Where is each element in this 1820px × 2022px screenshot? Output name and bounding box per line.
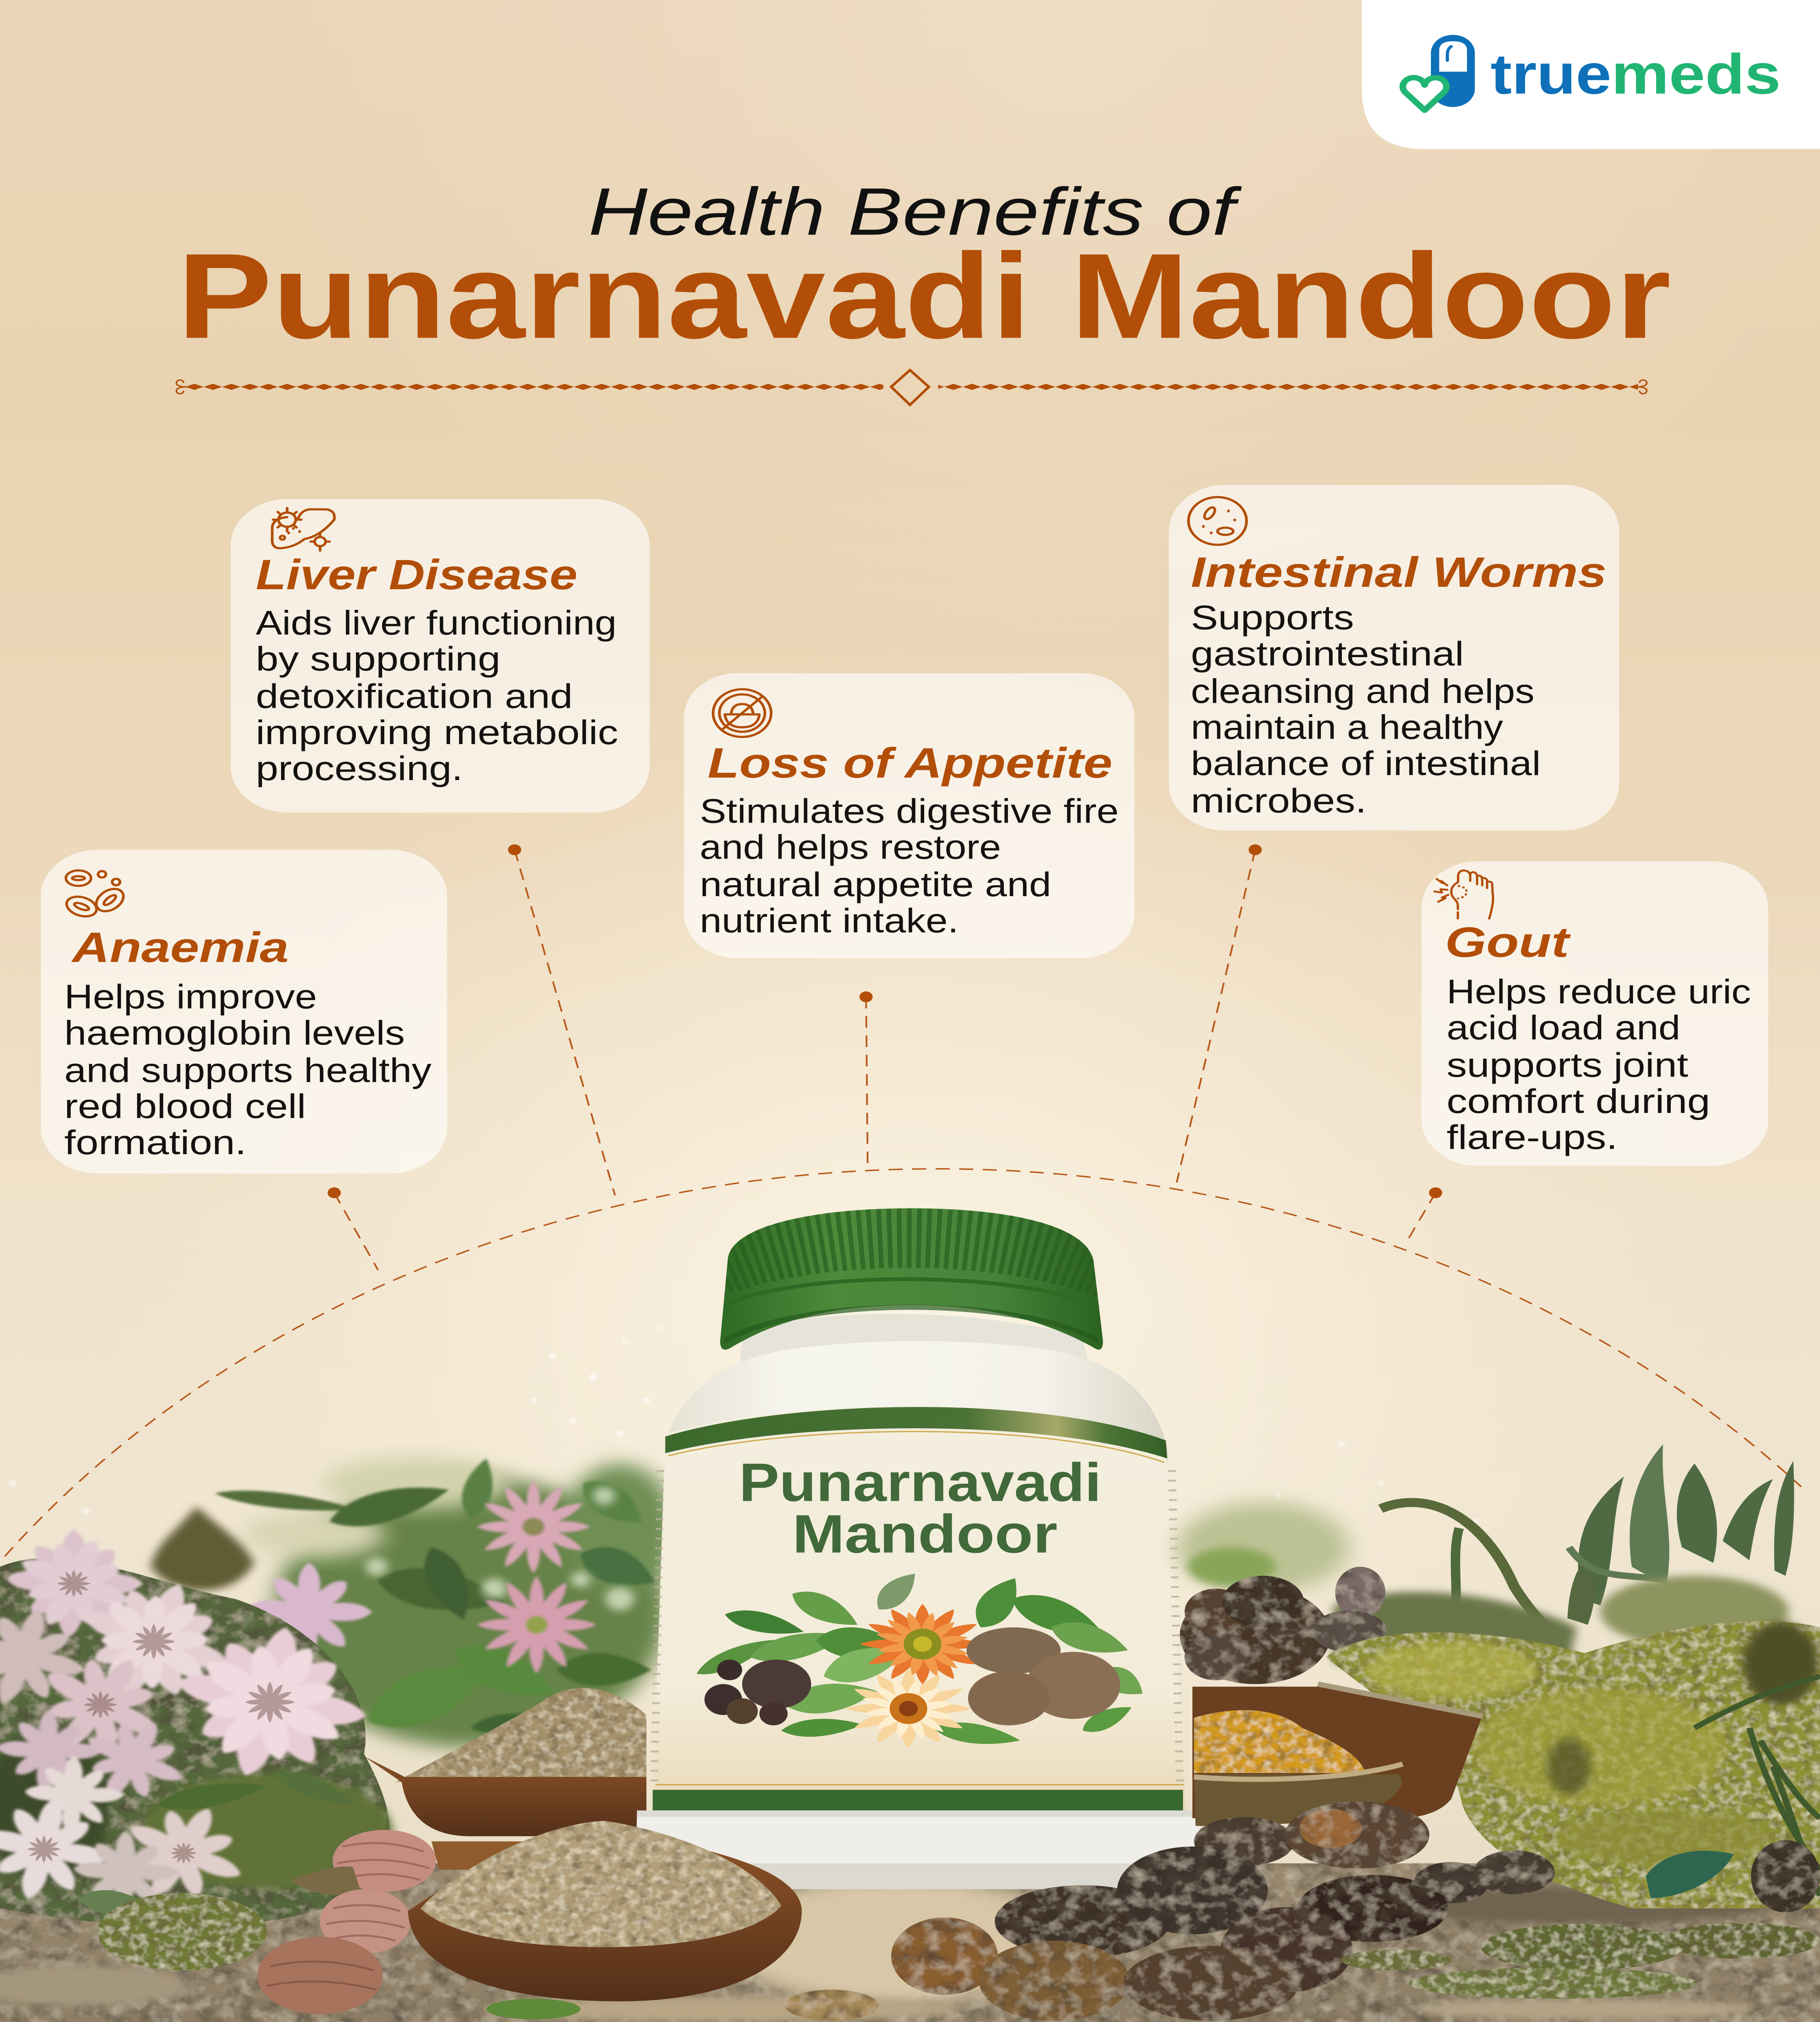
body text: natural appetite and <box>700 865 1051 903</box>
body text: by supporting <box>256 640 501 678</box>
heading: Gout <box>1445 918 1571 966</box>
body text: and helps restore <box>700 828 1001 866</box>
roots <box>705 1627 1120 1725</box>
panel: intestinal worms <box>1169 485 1619 831</box>
icon: bowl with slash <box>713 689 771 737</box>
heading: Liver Disease <box>256 551 578 599</box>
scene: yellow-green herbs mound <box>1326 1621 1820 1908</box>
body text <box>700 792 1119 939</box>
body text: flare-ups. <box>1447 1118 1618 1156</box>
scene: front dark rocks <box>785 1802 1555 2021</box>
bottle shoulder and neck <box>737 1314 1092 1382</box>
icon: microbes <box>1189 497 1246 545</box>
label text: Punarnavadi <box>739 1452 1101 1512</box>
panel: loss of appetite <box>684 673 1134 958</box>
scene: front powder bowl with nuts <box>257 1821 802 2014</box>
brand logo panel <box>1362 0 1820 149</box>
body text <box>64 977 432 1161</box>
body text: processing. <box>256 749 463 787</box>
heading: Loss of Appetite <box>708 739 1112 787</box>
base and lower band <box>656 1784 1185 1785</box>
body text: improving metabolic <box>256 713 618 751</box>
nuts <box>257 1830 526 2014</box>
body text: formation. <box>64 1123 246 1161</box>
orange flower <box>860 1603 985 1686</box>
icon: blood cells <box>63 870 129 920</box>
body text: microbes. <box>1191 782 1367 820</box>
label text <box>739 1452 1101 1564</box>
panel: anaemia <box>41 850 447 1174</box>
cap <box>720 1208 1103 1350</box>
body text: supports joint <box>1447 1046 1688 1084</box>
wordmark: true <box>1490 43 1611 106</box>
scene: left background foliage <box>150 1456 676 1747</box>
bottle of Punarnavadi Mandoor <box>635 1208 1200 1889</box>
body text: and supports healthy <box>64 1051 432 1089</box>
turmeric <box>1194 1710 1365 1773</box>
scene: moss <box>97 1893 267 1970</box>
brass bowl <box>1194 1775 1403 1826</box>
label herbs illustration <box>692 1567 1151 1750</box>
label <box>653 1407 1186 1812</box>
scene: right bowls with turmeric <box>1192 1684 1483 1826</box>
main heading: Punarnavadi Mandoor <box>177 228 1671 364</box>
body text: Supports <box>1191 599 1354 637</box>
scene: back powder bowl <box>364 1688 646 1836</box>
panel: gout <box>1422 861 1768 1166</box>
cream flower <box>846 1669 971 1748</box>
label text: Mandoor <box>792 1504 1058 1564</box>
body text: acid load and <box>1447 1009 1680 1047</box>
icon: liver <box>272 508 334 551</box>
body text: maintain a healthy <box>1191 708 1503 746</box>
body text: gastrointestinal <box>1191 635 1464 673</box>
panel: liver disease <box>231 499 650 812</box>
heading: Anaemia <box>71 924 289 971</box>
body text <box>256 603 618 787</box>
subtitle line: Health Benefits of <box>588 174 1242 249</box>
ornamental divider <box>176 370 1647 405</box>
body text: detoxification and <box>256 677 573 715</box>
body text: Helps reduce uric <box>1447 972 1751 1011</box>
scene: moss and teal leaf at right <box>487 1840 1820 2019</box>
body text: Helps improve <box>64 977 317 1016</box>
title <box>177 174 1671 364</box>
body text: cleansing and helps <box>1191 672 1534 710</box>
sparkles <box>9 1326 1478 1524</box>
body text <box>1191 599 1541 820</box>
body text: balance of intestinal <box>1191 744 1541 782</box>
scene: right back herbs and tall leaves <box>1177 1444 1794 1663</box>
top green band <box>665 1407 1167 1458</box>
bowl <box>408 1846 802 2001</box>
body text: Stimulates digestive fire <box>700 792 1119 830</box>
body text: comfort during <box>1447 1082 1710 1120</box>
scene: back pink flowers <box>247 1480 596 1674</box>
scene: front left flowers on dark foliage <box>0 1522 392 1927</box>
body text <box>1447 972 1751 1156</box>
icon: capsule and heart <box>1403 35 1475 110</box>
body text: Aids liver functioning <box>256 603 617 642</box>
heading: Intestinal Worms <box>1191 548 1606 596</box>
body text: haemoglobin levels <box>64 1013 405 1052</box>
connector dots <box>328 844 1442 1198</box>
wordmark: meds <box>1611 43 1781 106</box>
scene: ground <box>0 1863 1820 2022</box>
dashed arc with connector lines <box>5 850 1801 1557</box>
scene: dark stones behind bowl <box>1180 1567 1387 1684</box>
ribbed label edges <box>654 1470 1180 1786</box>
body text: red blood cell <box>64 1087 306 1125</box>
body text: nutrient intake. <box>700 901 959 939</box>
icon: foot with painful joint <box>1435 870 1493 919</box>
